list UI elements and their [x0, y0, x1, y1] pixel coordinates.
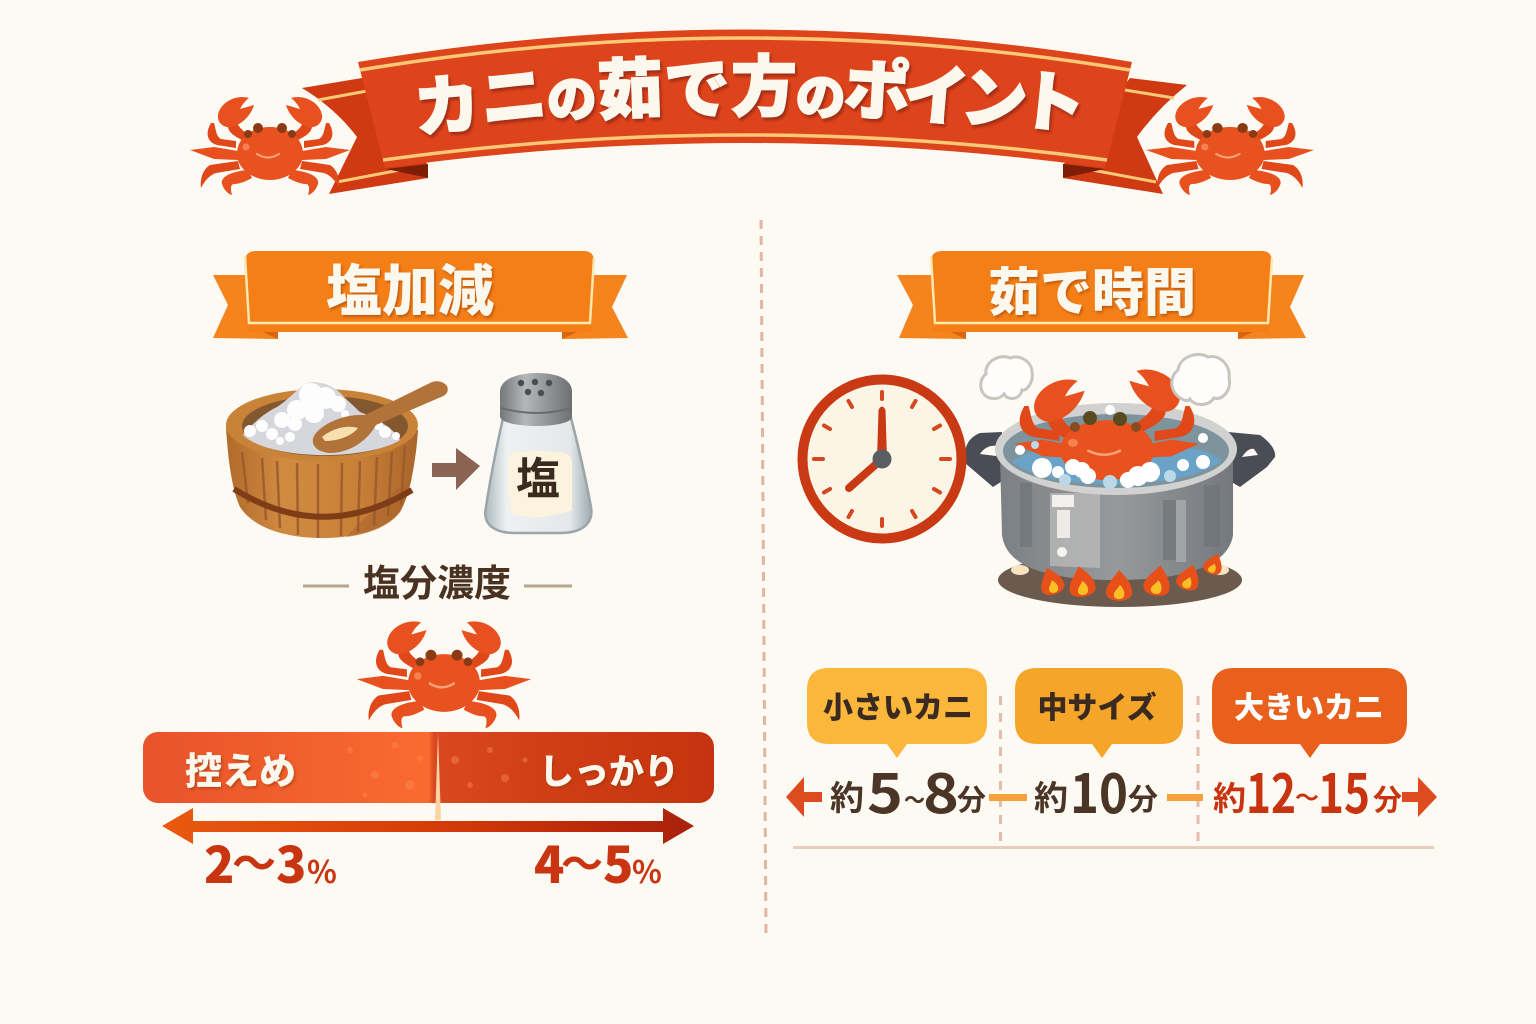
ribbon right tail	[1063, 78, 1187, 194]
ribbon left tail	[302, 78, 428, 194]
salt heading ribbon	[213, 247, 628, 339]
value: 2-3 percent: 3	[276, 826, 306, 898]
time: large crab: 15	[1318, 750, 1370, 829]
time: large crab: 〜	[1295, 778, 1319, 813]
time: large crab: 分	[1373, 777, 1402, 819]
time: medium crab: 分	[1128, 775, 1158, 819]
time heading text: 茹で時間	[988, 251, 1196, 326]
crab in pot	[1015, 370, 1199, 480]
vertical dashed separators	[1000, 696, 1198, 846]
flames	[1036, 550, 1226, 601]
callout: large crab: 大きいカニ	[1234, 683, 1384, 727]
title text: の	[794, 57, 847, 131]
title text	[410, 34, 1091, 152]
pot body	[1000, 455, 1233, 580]
callout: large crab	[1212, 668, 1407, 758]
salt heading text: 塩加減	[326, 247, 494, 328]
scale pointer	[435, 733, 441, 820]
time: medium crab: 約	[1034, 771, 1068, 820]
value: 2-3 percent: 2	[204, 826, 234, 898]
icon: crab right of title	[1146, 97, 1314, 195]
title banner	[302, 30, 1187, 194]
title text: ポ	[842, 36, 913, 136]
salt pile	[243, 382, 400, 455]
callout: medium crab: 中サイズ	[1037, 683, 1157, 727]
icon: clock	[802, 380, 962, 538]
panel: boiling time	[786, 251, 1437, 849]
time: small crab: 5	[867, 750, 903, 829]
callout: medium crab	[1015, 668, 1183, 758]
panel: salt	[143, 247, 714, 898]
time: small crab: 約	[830, 771, 864, 820]
callout: small crab: 小さいカニ	[823, 683, 973, 727]
title text: カ	[410, 50, 484, 152]
time: medium crab	[1034, 750, 1158, 829]
title text: イ	[899, 40, 973, 142]
title text: ニ	[475, 41, 551, 143]
value: 4-5 percent: %	[632, 847, 662, 892]
title text: ン	[957, 44, 1033, 146]
icon: crab above scale	[357, 621, 531, 728]
stove	[998, 553, 1242, 607]
center dashed divider	[761, 220, 766, 936]
value: 4-5 percent: 4	[534, 826, 564, 898]
time: large crab: 12	[1246, 750, 1296, 829]
pot rim and water	[995, 403, 1237, 495]
value: 2-3 percent: 〜	[232, 828, 276, 892]
baseline	[793, 846, 1434, 849]
title text: ト	[1015, 47, 1091, 149]
time: small crab: 8	[923, 750, 959, 829]
ribbon main	[358, 30, 1132, 168]
salinity scale bar	[143, 732, 714, 820]
time: small crab: 分	[957, 777, 986, 819]
value: 4-5 percent	[534, 826, 662, 898]
title text: 方	[731, 34, 797, 130]
title text: 茹	[595, 36, 665, 134]
label: low salt: 控えめ	[185, 741, 296, 795]
salinity caption: 塩分濃度	[363, 553, 511, 607]
time: medium crab: 10	[1070, 750, 1128, 829]
time: small crab	[830, 750, 986, 829]
icon: wooden salt tub	[226, 381, 448, 538]
connector	[1167, 794, 1203, 801]
label: high salt: しっかり	[539, 744, 679, 795]
double arrow	[162, 808, 694, 844]
shaker label: 塩	[516, 443, 560, 507]
value: 2-3 percent: %	[307, 847, 337, 892]
icon: salt shaker	[485, 373, 591, 533]
value: 4-5 percent: 〜	[561, 831, 603, 892]
title text: の	[544, 58, 599, 134]
icon: pot on stove	[965, 370, 1275, 607]
arrow	[432, 448, 480, 490]
pot handles	[965, 432, 1275, 487]
left arrow	[786, 777, 822, 817]
connector	[989, 794, 1027, 801]
icon: crab left of title	[190, 97, 350, 195]
time: large crab	[1213, 750, 1402, 829]
right arrow	[1402, 777, 1437, 817]
value: 4-5 percent: 5	[603, 826, 633, 898]
title text: で	[662, 36, 732, 134]
icon: steam clouds	[981, 355, 1230, 404]
time: large crab: 約	[1213, 772, 1246, 820]
time: small crab: 〜	[904, 783, 925, 815]
bubbles	[1015, 405, 1210, 488]
time heading ribbon	[897, 251, 1306, 339]
wooden spoon	[313, 381, 448, 453]
callout: small crab	[807, 668, 987, 758]
value: 2-3 percent	[204, 826, 337, 898]
clock hands	[849, 459, 882, 488]
